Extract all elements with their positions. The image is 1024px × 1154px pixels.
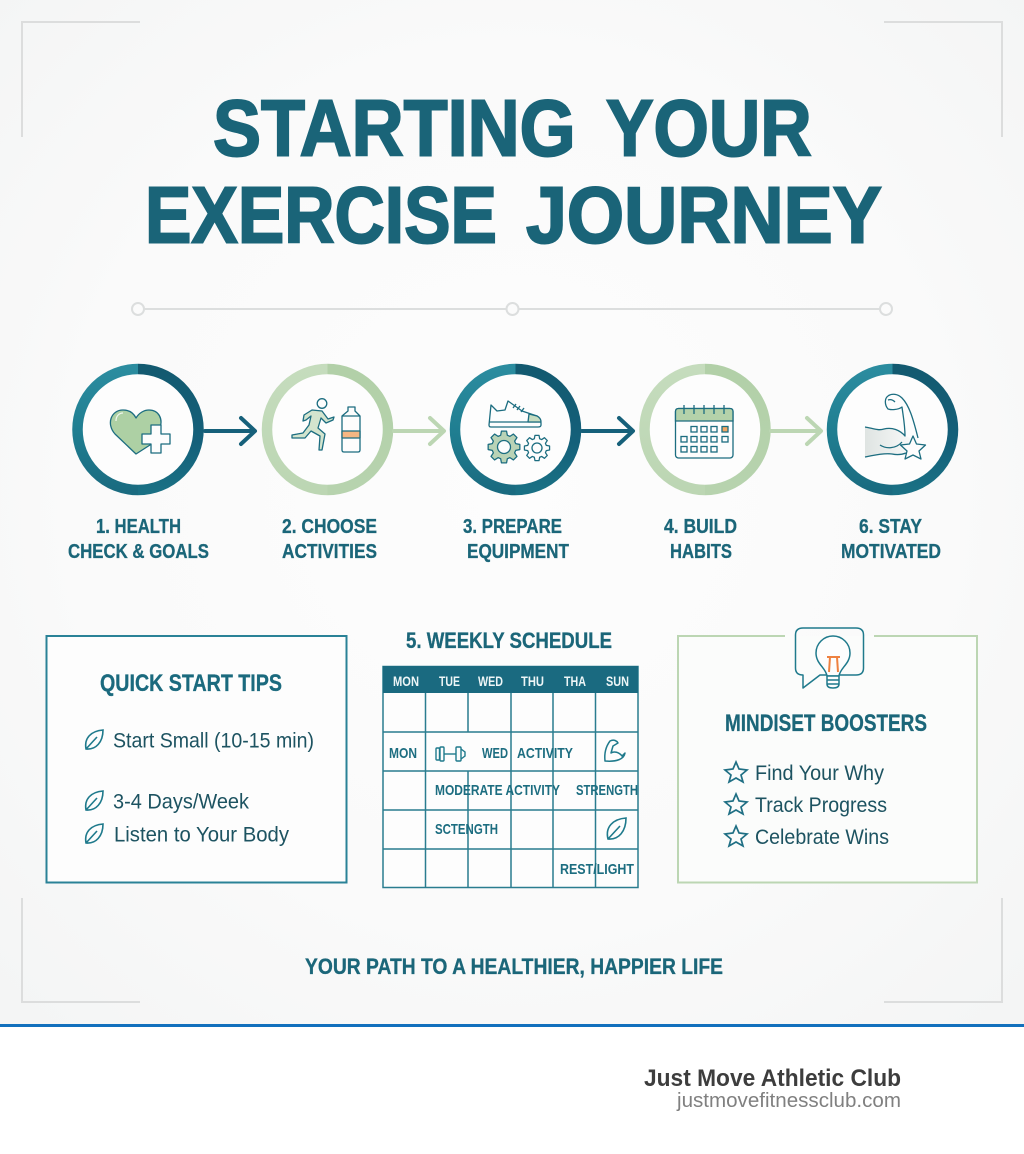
heading: mindiset boosters: MINDISET BOOSTERS [725, 710, 927, 737]
title: EXERCISE [145, 170, 497, 260]
ring 1 [77, 368, 199, 490]
table header: THU [521, 673, 544, 689]
panel: mindset boosters [678, 628, 977, 882]
step 1: health check and goals [68, 368, 209, 563]
step 4: build habits [644, 368, 766, 563]
table header [383, 666, 638, 693]
arrow 4 to 6 [771, 418, 821, 444]
title: YOUR [606, 84, 812, 173]
arrow 1 to 2 [205, 418, 255, 444]
arrow 2 to 3 [394, 418, 444, 444]
label 1 [68, 516, 209, 563]
arrow 3 to 4 [582, 418, 633, 444]
label 4 [664, 516, 737, 563]
label 3: EQUIPMENT [467, 541, 569, 563]
icon: flexed arm and star [865, 394, 926, 459]
panel: quick start tips [46, 636, 346, 882]
tagline: YOUR PATH TO A HEALTHIER, HAPPIER LIFE [305, 954, 723, 979]
heading: weekly schedule: 5. WEEKLY SCHEDULE [406, 628, 612, 653]
table cell text: SCTENGTH [435, 821, 498, 838]
title [145, 84, 882, 260]
icon: small leaf [607, 818, 626, 839]
ring 3 [454, 368, 576, 490]
table header: SUN [606, 673, 629, 689]
label 6: MOTIVATED [841, 541, 941, 563]
panel: weekly schedule [383, 628, 638, 888]
title: JOURNEY [526, 171, 882, 260]
title divider [132, 303, 892, 315]
icon: shoe and gears [488, 401, 550, 463]
icon: small arm [605, 740, 625, 761]
tip: listen to your body: Listen to Your Body [114, 824, 289, 846]
label 3 [463, 516, 569, 563]
tip: start small: Start Small (10-15 min) [113, 730, 314, 752]
table cell text: REST/LIGHT [560, 861, 634, 878]
table cell text: STRENGTH [576, 782, 638, 799]
step 3: prepare equipment [454, 368, 576, 563]
ring 5 [832, 368, 954, 490]
label 6: 6. STAY [859, 516, 923, 538]
table cell text: MODERATE ACTIVITY [435, 782, 560, 799]
tip: days per week: 3-4 Days/Week [113, 790, 249, 814]
heading: quick start tips: QUICK START TIPS [100, 670, 282, 697]
table cell text: ACTIVITY [517, 745, 573, 762]
table grid [383, 666, 638, 888]
table header: MON [393, 673, 419, 689]
table cell text [389, 745, 638, 878]
booster: find your why: Find Your Why [755, 762, 884, 785]
label 6 [841, 516, 941, 563]
label 1: CHECK & GOALS [68, 541, 209, 563]
icon: calendar [676, 405, 733, 458]
label 4: HABITS [670, 541, 732, 563]
label 3: 3. PREPARE [463, 516, 562, 538]
step 2: choose activities [266, 368, 388, 563]
title: STARTING [213, 84, 576, 173]
label 2: 2. CHOOSE [282, 516, 377, 538]
table cell text: WED [482, 745, 508, 762]
table header: WED [478, 673, 503, 689]
label 4: 4. BUILD [664, 516, 737, 538]
icon: speech bubble with lightbulb [796, 628, 864, 688]
icon: dumbbell [436, 747, 465, 761]
table header: THA [564, 673, 586, 689]
label 1: 1. HEALTH [96, 516, 181, 538]
table cell text: MON [389, 745, 417, 762]
ring 2 [266, 368, 388, 490]
footer url: justmovefitnessclub.com [676, 1090, 901, 1112]
booster: track progress: Track Progress [755, 794, 887, 817]
footer brand name: Just Move Athletic Club [644, 1065, 901, 1092]
table header: TUE [439, 673, 460, 689]
booster: celebrate wins: Celebrate Wins [755, 826, 889, 849]
icon: runner and bottle [292, 399, 360, 452]
label 2 [282, 516, 377, 563]
step 6: stay motivated [832, 368, 954, 563]
label 2: ACTIVITIES [282, 541, 377, 563]
ring 4 [644, 368, 766, 490]
icon: heart with plus [110, 410, 170, 454]
footer [0, 1024, 1024, 1154]
